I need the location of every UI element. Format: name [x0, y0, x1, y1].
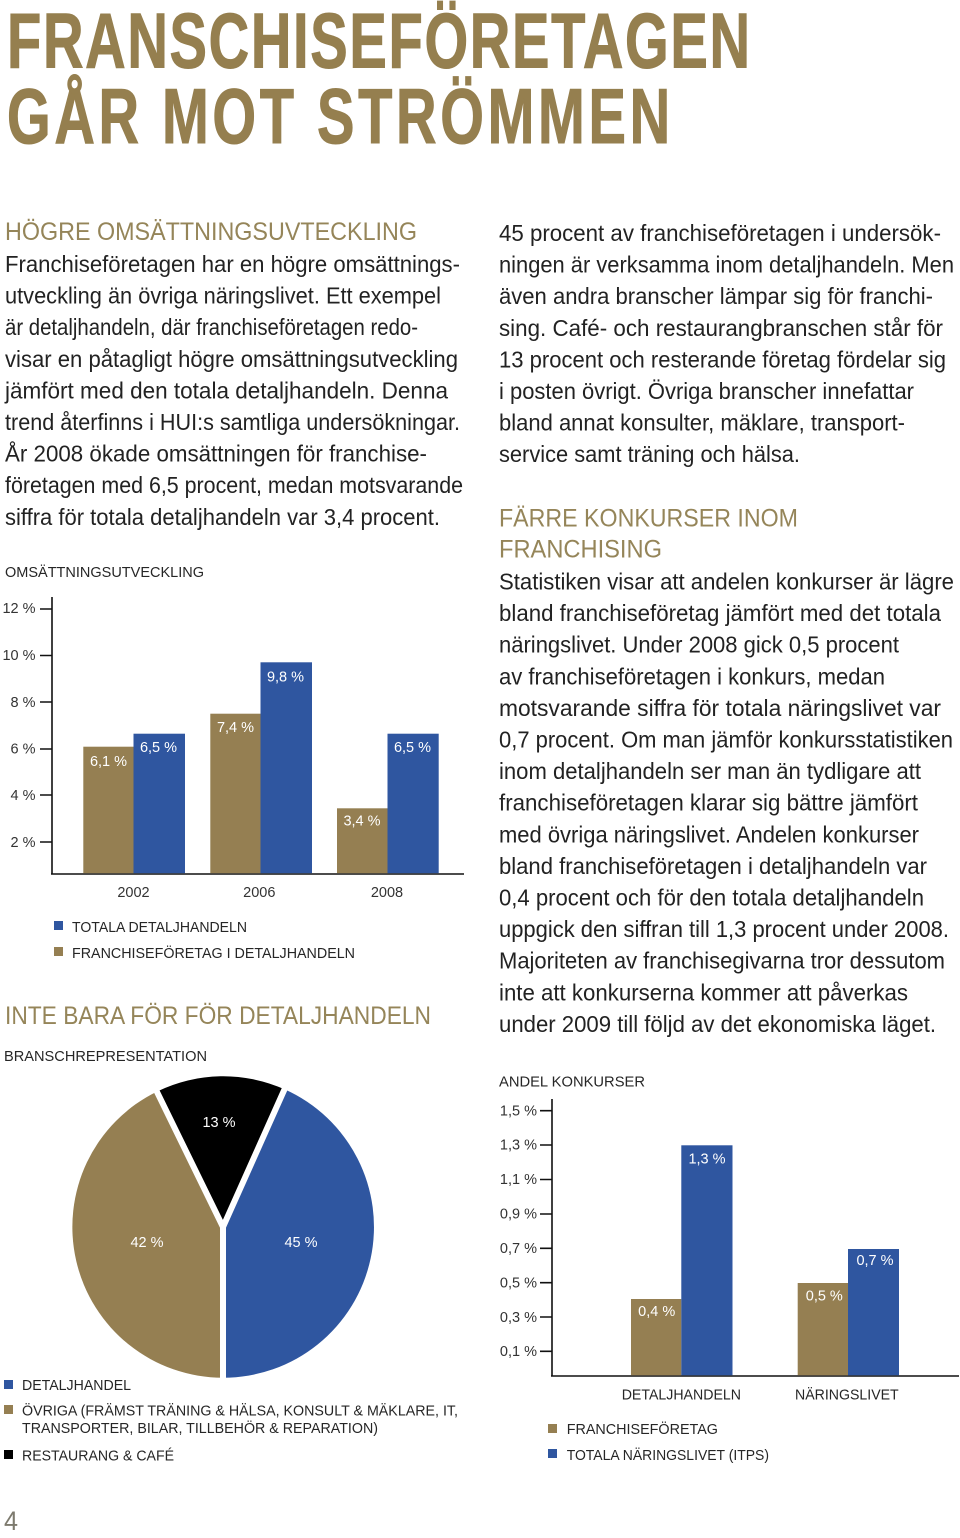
y axis labels: 10 %: [2, 648, 36, 664]
text block: left intro: [4, 251, 463, 530]
bar chart: omsättningsutveckling: [2, 564, 464, 962]
text block: konkurser: motsvarande siffra för totala näringslivet var: [499, 695, 941, 721]
bars 2002: 6,5 %: [140, 740, 177, 756]
bars näringslivet: 0,7 %: [856, 1253, 894, 1269]
text block: konkurser: av franchiseföretagen i konkurs, medan: [499, 663, 885, 689]
text block: konkurser: bland franchiseföretagen i detaljhandeln var: [499, 853, 927, 879]
pie chart: branschrepresentation: 13 %: [202, 1115, 236, 1131]
text block: konkurser: med övriga näringslivet. Andelen konkurser: [499, 821, 919, 847]
x axis labels: 2006: [243, 885, 275, 901]
bars detaljhandeln: 0,4 %: [638, 1304, 675, 1320]
bars 2008: 6,5 %: [394, 740, 431, 756]
text block: right intro: service samt träning och hälsa.: [499, 441, 800, 467]
pie chart: branschrepresentation: [4, 1048, 458, 1465]
heading: färre konkurser: [499, 505, 798, 564]
text block: right intro: bland annat konsulter, mäklare, transport-: [499, 410, 905, 436]
legend: FRANCHISEFÖRETAG I DETALJHANDELN: [72, 944, 355, 962]
x axis labels: 2008: [371, 885, 403, 901]
chart title: BRANSCHREPRESENTATION: [4, 1048, 207, 1065]
title: [7, 0, 750, 160]
bars näringslivet: [798, 1249, 899, 1375]
y axis labels: 2 %: [10, 835, 36, 851]
text block: left intro: Franchiseföretagen har en högre omsättnings-: [5, 251, 460, 277]
text block: left intro: utveckling än övriga näringslivet. Ett exempel: [5, 283, 441, 309]
pie chart: branschrepresentation: 45 %: [284, 1235, 318, 1251]
text block: left intro: företagen med 6,5 procent, medan motsvarande: [5, 472, 463, 498]
bars 2002: [83, 734, 185, 873]
y axis labels: 0,3 %: [500, 1310, 537, 1326]
legend: TOTALA NÄRINGSLIVET (ITPS): [567, 1447, 769, 1464]
y axis labels: [500, 1104, 537, 1360]
bars 2006: [210, 662, 312, 873]
bars detaljhandeln: 1,3 %: [688, 1151, 726, 1167]
text block: konkurser: uppgick den siffran till 1,3 procent under 2008.: [499, 916, 949, 942]
bars 2006: 7,4 %: [217, 720, 254, 736]
text block: right intro: 13 procent och resterande företag fördelar sig: [499, 346, 946, 372]
y axis labels: [2, 601, 36, 851]
text block: konkurser: under 2009 till följd av det ekonomiska läget.: [499, 1011, 936, 1037]
text block: left intro: jämfört med den totala detaljhandeln. Denna: [4, 377, 448, 403]
pie legend: TRANSPORTER, BILAR, TILLBEHÖR & REPARATION): [22, 1419, 378, 1437]
text block: left intro: År 2008 ökade omsättningen för franchise-: [5, 440, 427, 467]
y axis labels: 1,1 %: [500, 1172, 537, 1188]
bars 2008: 3,4 %: [343, 814, 381, 830]
text block: konkurser: inte att konkurserna kommer att påverkas: [499, 979, 908, 1005]
text block: konkurser: Statistiken visar att andelen konkurser är lägre: [499, 568, 954, 594]
y axis labels: 12 %: [2, 601, 36, 617]
text block: right intro: i posten övrigt. Övriga branscher innefattar: [499, 378, 914, 404]
legend: [54, 919, 355, 962]
pie legend: RESTAURANG & CAFÉ: [22, 1448, 174, 1465]
pie legend: ÖVRIGA (FRÄMST TRÄNING & HÄLSA, KONSULT & MÄKLARE, IT,: [22, 1402, 458, 1420]
chart title: OMSÄTTNINGSUTVECKLING: [5, 564, 204, 581]
text block: left intro: trend återfinns i HUI:s samtliga undersökningar.: [5, 409, 460, 435]
page number: 4: [4, 1506, 18, 1536]
heading: färre konkurser: FRANCHISING: [499, 536, 662, 564]
legend: TOTALA DETALJHANDELN: [72, 919, 247, 936]
text block: konkurser: bland franchiseföretag jämfört med det totala: [499, 600, 941, 626]
heading: inte bara för detaljhandeln: INTE BARA FÖR FÖR DETALJHANDELN: [5, 1002, 431, 1030]
pie legend: DETALJHANDEL: [22, 1377, 131, 1394]
x axis labels: [117, 885, 403, 901]
y axis labels: 1,3 %: [500, 1138, 537, 1154]
heading: färre konkurser: FÄRRE KONKURSER INOM: [499, 505, 798, 533]
pie chart: branschrepresentation: 42 %: [130, 1235, 164, 1251]
text block: konkurser: inom detaljhandeln ser man än tydligare att: [499, 758, 922, 784]
bars 2002: 6,1 %: [90, 754, 127, 770]
text block: konkurser: [499, 568, 954, 1037]
bar chart: andel konkurser: [499, 1074, 959, 1464]
chart title: ANDEL KONKURSER: [499, 1074, 645, 1091]
y axis labels: 1,5 %: [500, 1104, 537, 1120]
text block: konkurser: näringslivet. Under 2008 gick 0,5 procent: [499, 632, 900, 658]
y axis labels: 0,5 %: [500, 1276, 537, 1292]
title: FRANSCHISEFÖRETAGEN: [7, 0, 750, 85]
bars näringslivet: 0,5 %: [806, 1289, 843, 1305]
bars 2008: [337, 734, 439, 873]
y axis labels: 4 %: [10, 788, 36, 804]
text block: right intro: 45 procent av franchiseföretagen i undersök-: [499, 220, 941, 246]
y axis labels: 8 %: [10, 695, 36, 711]
bars 2006: 9,8 %: [267, 670, 304, 686]
text block: left intro: siffra för totala detaljhandeln var 3,4 procent.: [5, 504, 440, 530]
legend: FRANCHISEFÖRETAG: [567, 1420, 718, 1438]
text block: konkurser: Majoriteten av franchisegivarna tror dessutom: [499, 948, 945, 974]
pie wedges: [72, 1076, 374, 1380]
text block: left intro: visar en påtagligt högre omsättningsutveckling: [5, 346, 458, 372]
text block: konkurser: franchiseföretagen klarar sig bättre jämfört: [499, 790, 919, 816]
y axis labels: 0,9 %: [500, 1206, 537, 1222]
y axis labels: 6 %: [10, 742, 36, 758]
x axis labels: [622, 1386, 899, 1403]
y axis labels: 0,1 %: [500, 1344, 537, 1360]
y axis labels: 0,7 %: [500, 1241, 537, 1257]
x axis labels: 2002: [117, 885, 150, 901]
text block: konkurser: 0,4 procent och för den totala detaljhandeln: [499, 884, 924, 910]
text block: left intro: är detaljhandeln, där franchiseföretagen redo-: [5, 314, 418, 340]
legend: [548, 1420, 769, 1464]
heading: högre omsättningsutveckling: HÖGRE OMSÄTTNINGSUVTECKLING: [5, 218, 417, 246]
title: GÅR MOT STRÖMMEN: [7, 73, 670, 160]
text block: right intro: sing. Café- och restaurangbranschen står för: [499, 315, 943, 341]
text block: right intro: [499, 220, 954, 467]
x axis labels: NÄRINGSLIVET: [795, 1386, 899, 1403]
bars detaljhandeln: [631, 1145, 732, 1375]
text block: right intro: även andra branscher lämpar sig för franchi-: [499, 283, 933, 309]
x axis labels: DETALJHANDELN: [622, 1386, 741, 1403]
pie legend: [4, 1377, 458, 1465]
